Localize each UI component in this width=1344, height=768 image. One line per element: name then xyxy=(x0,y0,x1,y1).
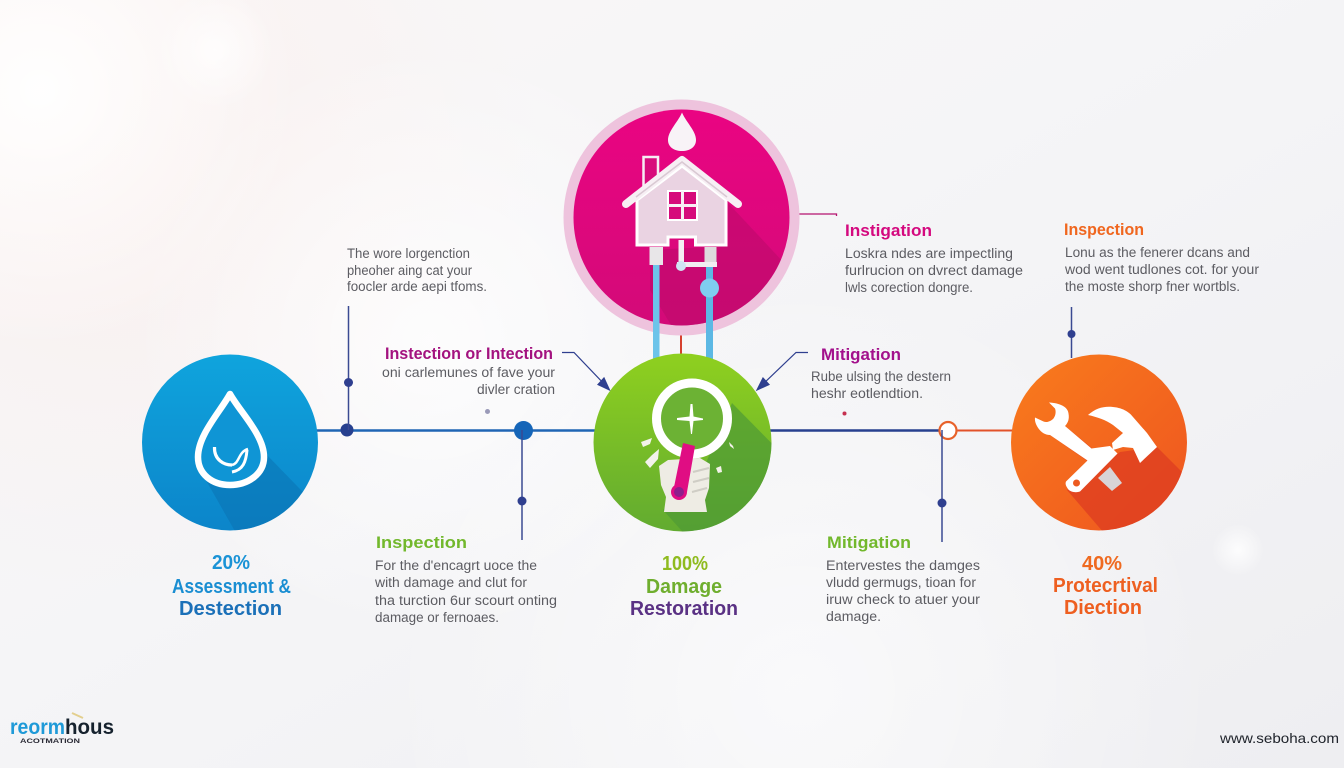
text block: top left note: foocler arde aepi tfoms. xyxy=(347,279,487,294)
icon: water drop xyxy=(668,112,696,151)
wrench drop shadow xyxy=(1050,426,1092,461)
logo: ACOTMATION xyxy=(20,738,80,745)
long shadow xyxy=(207,456,303,530)
icon: fist xyxy=(659,458,710,512)
label: 100% Damage Restoration xyxy=(630,553,738,620)
callout: Mitigation magenta: Rube ulsing the destern xyxy=(811,369,951,384)
icon: pink handle xyxy=(673,443,695,492)
label: 40% Protecrtival Diection: Diection xyxy=(1064,597,1142,619)
vertical leader lines with dots xyxy=(344,306,1076,542)
logo: hous xyxy=(65,716,114,739)
label: 20% Assessment and Detection: Destection xyxy=(179,598,282,620)
icon: magnifier lens xyxy=(656,383,728,454)
logo xyxy=(10,713,114,745)
text block: top left note: pheoher aing cat your xyxy=(347,263,472,278)
panel: green restoration circle xyxy=(594,354,772,532)
callout: Inspection orange: Inspection xyxy=(1064,220,1144,239)
text block: top left note xyxy=(347,246,487,294)
icon: water drop with swirl xyxy=(198,394,264,485)
arrow: left callout to green circle xyxy=(562,352,610,390)
label: 40% Protecrtival Diection: 40% xyxy=(1082,553,1122,575)
callout: Inspection green: Inspection xyxy=(376,533,467,552)
label: 40% Protecrtival Diection: Protecrtival xyxy=(1053,575,1158,597)
callout: Inspection orange: Lonu as the fenerer dcans and xyxy=(1065,245,1250,260)
house long shadow xyxy=(650,203,781,326)
icon: wrench xyxy=(1035,402,1118,492)
long shadow xyxy=(1067,447,1182,530)
label: 20% Assessment and Detection xyxy=(172,552,291,620)
icon: hammer handle xyxy=(1098,467,1122,491)
timeline connector xyxy=(316,421,1014,440)
callout: Inspection orange: wod went tudlones cot. for your xyxy=(1064,262,1260,277)
long shadow xyxy=(663,403,772,532)
label: 100% Damage Restoration: Damage xyxy=(646,576,722,598)
callout: Mitigation green: Mitigation xyxy=(827,533,911,552)
label: 20% Assessment and Detection: 20% xyxy=(212,552,250,574)
callout: Instigation: Loskra ndes are impectling xyxy=(845,246,1013,261)
callout: Instection or Intection: oni carlemunes of fave your xyxy=(382,365,556,380)
label: 100% Damage Restoration: Restoration xyxy=(630,598,738,620)
label: 40% Protecrtival Diection xyxy=(1053,553,1158,619)
callout: Inspection green: damage or fernoaes. xyxy=(375,610,499,625)
callout: Mitigation magenta xyxy=(811,345,951,401)
callout: Instigation: furlrucion on dvrect damage xyxy=(845,263,1023,278)
callout: Inspection green xyxy=(374,533,557,625)
panel: orange tools circle xyxy=(1011,354,1192,540)
callout: Mitigation magenta: heshr eotlendtion. xyxy=(811,386,923,401)
callout: Inspection green: For the d'encagrt uoce the xyxy=(375,558,537,573)
pink leader line xyxy=(798,214,836,216)
text block: top left note: The wore lorgenction xyxy=(347,246,470,261)
icon: house xyxy=(626,157,738,271)
panel: blue assessment circle xyxy=(142,354,318,530)
red connector pink to green xyxy=(680,326,682,358)
icon: hammer head xyxy=(1088,407,1157,463)
callout: Instigation: Instigation xyxy=(845,221,932,240)
callout: Inspection orange xyxy=(1064,220,1260,294)
callout: Instigation xyxy=(845,221,1023,295)
callout: Instection or Intection xyxy=(382,344,556,397)
water pipes xyxy=(653,265,719,360)
panel: pink house circle xyxy=(564,100,800,340)
arrow: right callout to green circle xyxy=(757,352,808,390)
callout: Mitigation magenta: Mitigation xyxy=(821,345,901,364)
callout: Instigation: lwls corection dongre. xyxy=(845,280,973,295)
icon: plus xyxy=(677,404,703,434)
callout: Mitigation green: iruw check to atuer your xyxy=(826,592,981,607)
callout: Instection or Intection: Instection or Intection xyxy=(385,344,553,363)
callout: Mitigation green: vludd germugs, tioan for xyxy=(826,575,977,590)
callout: Mitigation green xyxy=(826,533,981,624)
callout: Mitigation green: Entervestes the damges xyxy=(826,558,980,573)
label: 20% Assessment and Detection: Assessment & xyxy=(172,576,291,598)
logo: reorm xyxy=(10,716,65,739)
label: 100% Damage Restoration: 100% xyxy=(662,553,708,575)
callout: Inspection orange: the moste shorp fner wortbls. xyxy=(1065,279,1240,294)
callout: Instection or Intection: divler cration xyxy=(477,382,555,397)
callout: Mitigation green: damage. xyxy=(826,609,881,624)
website url: www.seboha.com xyxy=(1219,730,1339,746)
callout: Inspection green: with damage and clut for xyxy=(374,575,528,590)
callout: Inspection green: tha turction 6ur scourt onting xyxy=(375,593,557,608)
icon: debris xyxy=(641,438,734,473)
